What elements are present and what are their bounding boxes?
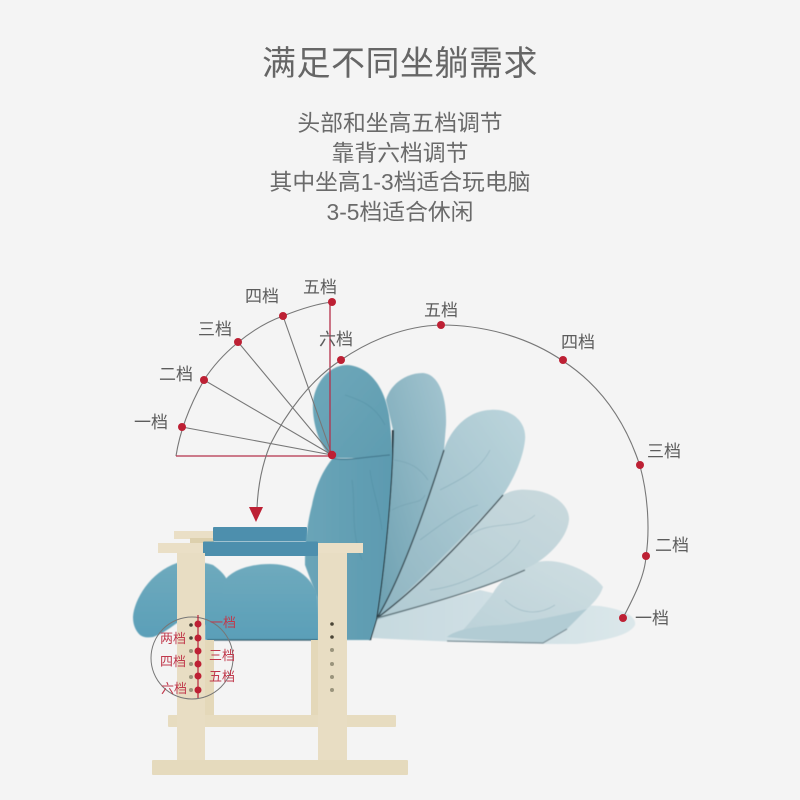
cushion position: upper recline — [376, 373, 446, 620]
seat height detail callout: 三档 — [209, 648, 235, 663]
backrest head lobe — [313, 365, 392, 458]
arc labels: 三档 — [647, 442, 681, 461]
arc labels: 六档 — [319, 330, 353, 349]
seat cushion front lobe — [133, 562, 227, 640]
backrest fold textures — [345, 395, 385, 560]
head adjustment fan diagram — [134, 278, 337, 459]
cushion divider lines — [370, 430, 567, 643]
backrest main cushion — [305, 365, 393, 640]
description text block — [270, 110, 530, 225]
reclined cushion positions fan — [370, 373, 635, 644]
fan dots — [178, 298, 336, 459]
description text block: 3-5档适合休闲 — [327, 199, 473, 225]
front wooden posts — [177, 553, 347, 766]
seat cushion — [133, 562, 320, 640]
low recline shaded lower edge — [447, 609, 587, 643]
cushion fold textures — [392, 450, 555, 612]
fan labels: 四档 — [245, 287, 279, 306]
backrest adjustment arc with arrow — [249, 301, 689, 628]
seat cushion rear lobe — [207, 564, 320, 640]
seat height detail callout: 六档 — [161, 681, 187, 696]
arc labels: 二档 — [655, 536, 689, 555]
seat height detail callout: 四档 — [160, 654, 186, 669]
cushion position: flattest — [372, 590, 635, 644]
seat height detail callout: 五档 — [209, 669, 235, 684]
cushion position: low recline — [447, 561, 603, 643]
cushion position: mid recline — [377, 410, 525, 620]
seat height detail callout: 两档 — [160, 631, 186, 646]
description text block: 靠背六档调节 — [332, 140, 468, 166]
front armrest — [158, 542, 363, 556]
cushion position: mid-low recline — [377, 490, 569, 620]
fan labels: 五档 — [303, 278, 337, 297]
description text block: 其中坐高1-3档适合玩电脑 — [270, 169, 530, 195]
bottom rail — [152, 760, 408, 775]
fan labels: 二档 — [159, 365, 193, 384]
fan labels — [134, 278, 337, 432]
wooden back posts and mid rail — [168, 640, 396, 727]
backrest lower body — [305, 430, 393, 640]
adjustment holes — [189, 622, 334, 692]
fan labels: 三档 — [198, 320, 232, 339]
arc labels: 一档 — [635, 609, 669, 628]
fan labels: 一档 — [134, 413, 168, 432]
arc labels: 四档 — [561, 333, 595, 352]
rear armrest — [174, 527, 307, 544]
description text block: 头部和坐高五档调节 — [297, 110, 503, 136]
arc dots — [337, 321, 650, 622]
seat height detail callout — [151, 615, 236, 699]
title: 满足不同坐躺需求 — [262, 45, 538, 83]
seat height detail callout: 一档 — [210, 615, 236, 630]
arrowhead — [249, 507, 263, 522]
arc labels — [319, 301, 689, 628]
arc labels: 五档 — [424, 301, 458, 320]
